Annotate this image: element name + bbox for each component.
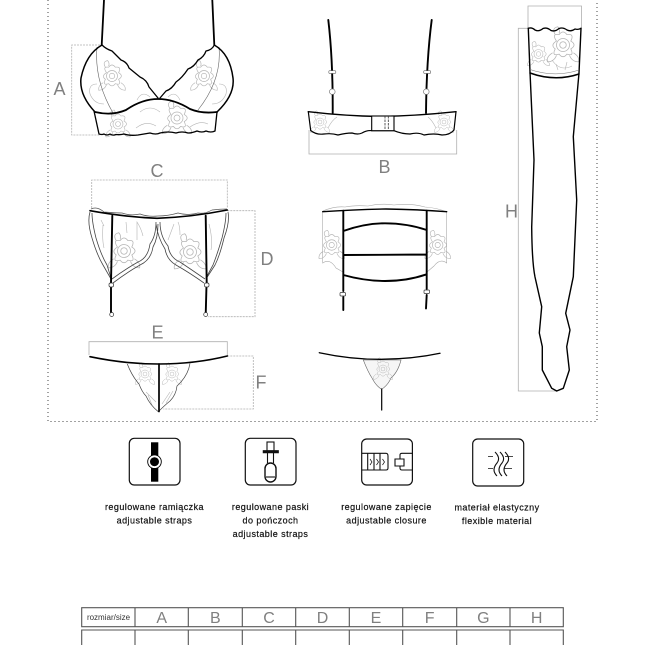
table header row: H xyxy=(531,610,542,627)
caption: stocking straps: adjustable straps xyxy=(233,529,308,539)
dimension H xyxy=(505,28,556,391)
garter belt back xyxy=(319,204,450,310)
stocking xyxy=(505,0,582,391)
dimension H: H xyxy=(505,202,518,222)
dimension G xyxy=(528,0,582,28)
dimension C xyxy=(92,161,227,208)
dimension B xyxy=(309,130,457,177)
table header row xyxy=(87,610,542,627)
dimension A: A xyxy=(53,79,66,99)
dotted frame xyxy=(48,0,597,422)
table header row: C xyxy=(263,610,275,627)
table header row: E xyxy=(371,610,381,627)
dimension D: D xyxy=(260,249,274,269)
caption: adjustable straps: regulowane ramiączka xyxy=(105,502,204,512)
caption: stocking straps: regulowane paski xyxy=(232,502,309,512)
clasp xyxy=(372,116,394,131)
dimension E xyxy=(89,322,227,355)
thong front xyxy=(89,322,266,412)
dimension D xyxy=(208,211,274,317)
caption: stocking straps: do pończoch xyxy=(242,516,298,526)
icon: flexible material xyxy=(473,439,524,486)
back clips xyxy=(340,290,430,296)
bra front xyxy=(53,0,233,137)
icon: stocking strap xyxy=(245,438,296,485)
garter clips xyxy=(109,283,209,316)
icon: adjustable strap xyxy=(129,438,180,485)
dimension A xyxy=(53,45,100,135)
size table xyxy=(82,608,563,645)
dimension F xyxy=(163,356,266,409)
thong back xyxy=(319,353,440,410)
garter belt front xyxy=(89,161,274,317)
strap sliders xyxy=(329,71,431,94)
table header row: B xyxy=(210,610,221,627)
table header row: D xyxy=(317,610,328,627)
dimension E: E xyxy=(151,322,164,342)
table header row: G xyxy=(477,610,490,627)
dimension B: B xyxy=(378,157,391,177)
dimension F: F xyxy=(256,372,266,392)
caption: adjustable straps: adjustable straps xyxy=(117,516,192,526)
table header row: F xyxy=(425,610,435,627)
caption: adjustable closure: adjustable closure xyxy=(346,516,427,526)
table header row: A xyxy=(156,610,167,627)
dimension C: C xyxy=(150,161,164,181)
caption: flexible material: materiał elastyczny xyxy=(454,502,540,512)
table header row: rozmiar/size xyxy=(87,613,131,622)
icon: adjustable closure xyxy=(362,439,412,485)
bra back xyxy=(308,20,457,177)
caption: adjustable closure: regulowane zapięcie xyxy=(341,502,432,512)
caption: flexible material: flexible material xyxy=(462,516,532,526)
